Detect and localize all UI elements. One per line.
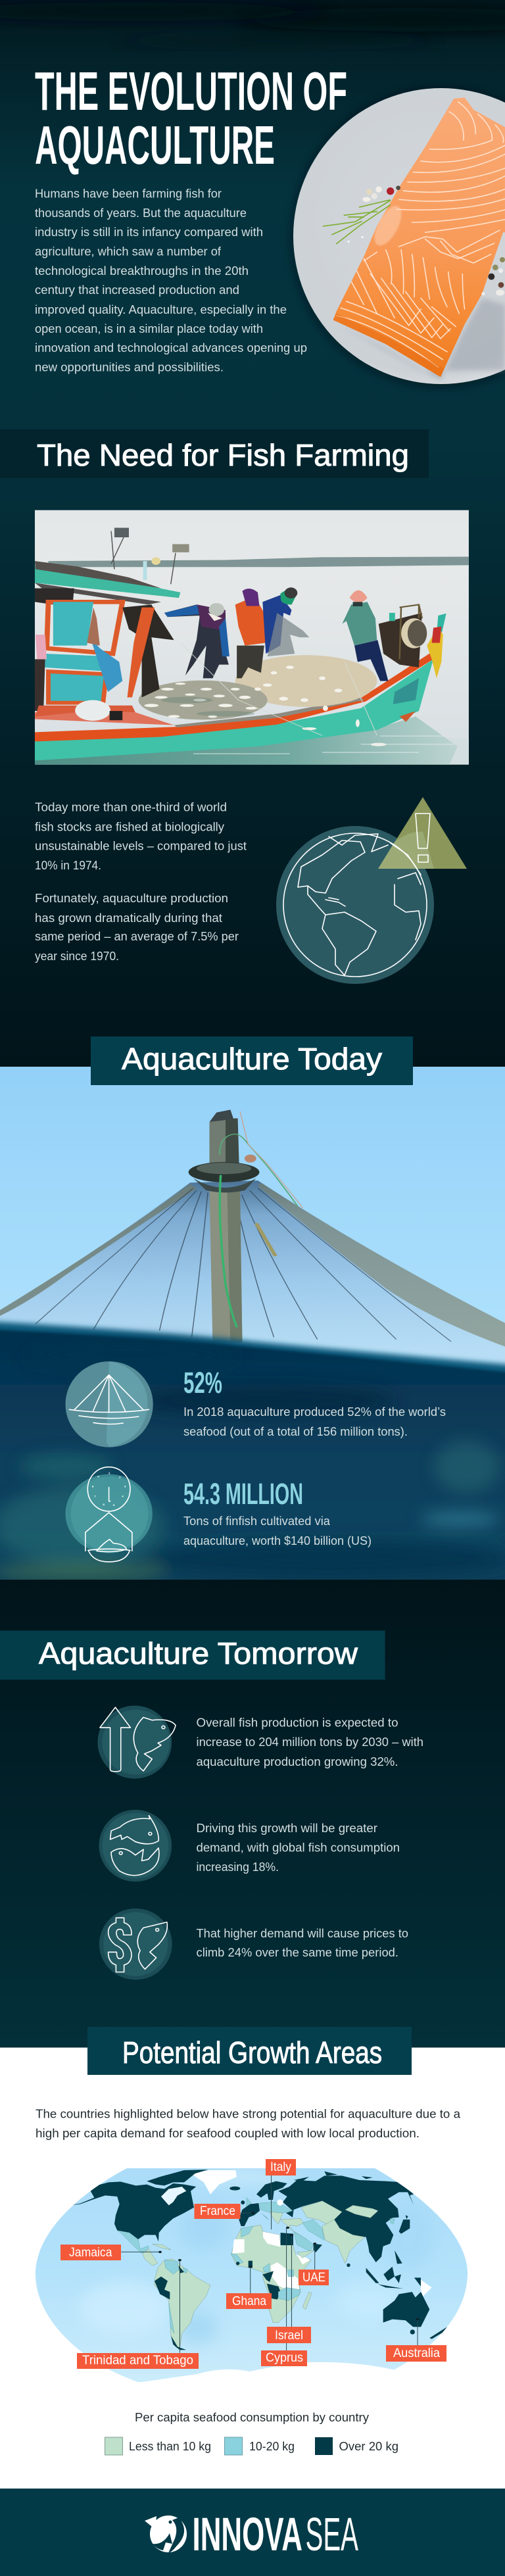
stat: 54.3 million with scale icon: Tons of finfish cultivated via [183, 1515, 331, 1528]
legend [105, 2411, 398, 2455]
middle east [280, 2218, 307, 2239]
text: overfishing facts: has grown dramatically during that [35, 911, 222, 925]
icon: scale with fish in bowl: 4 [122, 1495, 124, 1497]
southeast asia [366, 2268, 379, 2283]
map labels: Jamaica [69, 2246, 112, 2260]
intro paragraph: industry is still in its infancy compared with [35, 226, 263, 239]
background: dark ocean top section [0, 0, 505, 1067]
stat: 54.3 million with scale icon [65, 1467, 372, 1562]
icon: scale with fish in bowl: 7 [94, 1495, 97, 1497]
photo: fishermen hauling nets on a boat [35, 510, 469, 765]
map labels: Trinidad and Tobago [82, 2354, 193, 2368]
text: overfishing facts: 10% in 1974. [35, 859, 101, 872]
map labels: Israel [275, 2329, 303, 2343]
section heading: Aquaculture Tomorrow [0, 1631, 385, 1680]
map labels: Cyprus [266, 2351, 303, 2365]
item: fish production growth [97, 1706, 423, 1779]
south asia [322, 2220, 365, 2264]
photo background: aquaculture net pen in sky and water [0, 1067, 505, 1611]
world map of per capita seafood consumption [33, 2164, 473, 2384]
australia [383, 2292, 429, 2327]
item: higher prices: That higher demand will cause prices to [196, 1927, 408, 1940]
mexico [117, 2231, 149, 2254]
item: greater demand: demand, with global fish consumption [196, 1841, 400, 1855]
item: greater demand: Driving this growth will be greater [196, 1822, 377, 1835]
text: overfishing facts: unsustainable levels – compared to just [35, 839, 247, 852]
section heading: Aquaculture Today [91, 1036, 413, 1085]
map labels: Australia [393, 2346, 440, 2360]
icon: logo fish [145, 2515, 187, 2553]
legend: Over 20 kg [339, 2440, 398, 2453]
leader lines [121, 2175, 419, 2353]
icon: scale with fish in bowl: 2 [119, 1476, 121, 1478]
eurasia, africa and oceania [231, 2172, 450, 2339]
section heading: The Need for Fish Farming [0, 429, 429, 478]
icon: arrow and fish [97, 1706, 176, 1779]
icon: scale with fish in bowl: 9 [97, 1475, 100, 1478]
text: overfishing facts: year since 1970. [35, 950, 119, 963]
stat: 52 percent with net icon [65, 1361, 446, 1447]
item: fish production growth: aquaculture production growing 32%. [196, 1755, 398, 1768]
intro paragraph: agriculture, which saw a number of [35, 245, 222, 258]
main title: AQUACULTURE [35, 114, 275, 176]
legend: 10-20 kg [249, 2440, 295, 2453]
western europe isles [247, 2198, 253, 2206]
text: overfishing facts: same period – an average of 7.5% per [35, 930, 239, 943]
legend: Less than 10 kg [129, 2440, 211, 2453]
map labels: France [200, 2204, 235, 2218]
section heading: Potential Growth Areas: Potential Growth Areas [122, 2035, 382, 2070]
intro paragraph: Humans have been farming fish for [35, 187, 222, 200]
intro paragraph: open ocean, is in a similar place today with [35, 322, 263, 335]
icon: scale with fish in bowl [65, 1467, 153, 1562]
icon: scale with fish in bowl: 6 [103, 1503, 105, 1506]
map intro text [36, 2107, 461, 2140]
icon: dollar and fish [99, 1908, 172, 1980]
salmon plate image [291, 87, 505, 387]
background: dark band after today section through tomorrow section [0, 1580, 505, 2048]
section heading: The Need for Fish Farming: The Need for Fish Farming [37, 438, 409, 472]
icon: scale with fish in bowl: 3 [124, 1485, 126, 1488]
icon: scale with fish in bowl: 8 [92, 1485, 94, 1488]
greenland [191, 2170, 237, 2195]
mongolia [345, 2205, 378, 2218]
central asia [301, 2201, 342, 2224]
map intro text: The countries highlighted below have strong potential for aquaculture due to a [36, 2107, 461, 2120]
north america [69, 2181, 196, 2241]
intro paragraph: thousands of years. But the aquaculture [35, 207, 247, 220]
stat: 52 percent with net icon: 52% [183, 1366, 222, 1399]
text: overfishing facts: fish stocks are fished at biologically [35, 821, 224, 834]
item: greater demand: increasing 18%. [196, 1860, 279, 1874]
footer [0, 2489, 505, 2576]
intro paragraph: new opportunities and possibilities. [35, 360, 224, 374]
stat: 52 percent with net icon: In 2018 aquaculture produced 52% of the world’s [183, 1405, 446, 1419]
item: greater demand [99, 1810, 400, 1882]
map labels: Italy [270, 2160, 291, 2174]
section heading: Potential Growth Areas [87, 2027, 412, 2075]
americas and north atlantic [69, 2170, 253, 2350]
icon: scale with fish in bowl: 1 [108, 1471, 110, 1475]
stat: 54.3 million with scale icon: 54.3 MILLION [183, 1477, 303, 1511]
stat: 54.3 million with scale icon: aquaculture, worth $140 billion (US) [183, 1534, 372, 1547]
intro paragraph: improved quality. Aquaculture, especially in the [35, 303, 287, 316]
section heading: Aquaculture Today: Aquaculture Today [122, 1042, 382, 1076]
map labels: Ghana [232, 2295, 266, 2308]
europe and russia [278, 2175, 419, 2262]
intro paragraph: technological breakthroughs in the 20th [35, 264, 249, 278]
antarctica [141, 2362, 396, 2384]
east asia [390, 2218, 395, 2224]
icon: globe with warning triangle [276, 797, 467, 984]
icon: scale with fish in bowl: 5 [113, 1504, 115, 1507]
intro paragraph: century that increased production and [35, 283, 239, 297]
central europe [260, 2202, 293, 2213]
item: higher prices [99, 1908, 408, 1980]
text: overfishing facts: Today more than one-third of world [35, 801, 227, 814]
intro paragraph: innovation and technological advances opening up [35, 341, 307, 354]
central america and caribbean [143, 2249, 158, 2266]
map intro text: high per capita demand for seafood coupled with low local production. [36, 2127, 420, 2140]
item: fish production growth: Overall fish production is expected to [196, 1716, 398, 1730]
africa [231, 2225, 311, 2323]
south america [155, 2259, 210, 2349]
main title [35, 61, 347, 176]
section heading: Aquaculture Tomorrow: Aquaculture Tomorrow [39, 1636, 358, 1670]
item: higher prices: climb 24% over the same time period. [196, 1946, 398, 1959]
white panel: potential growth areas [0, 2048, 505, 2489]
icon: two fish [99, 1810, 172, 1882]
logo: Innovasea: SEA [305, 2509, 358, 2561]
text: overfishing facts: Fortunately, aquaculture production [35, 892, 228, 905]
intro paragraph [35, 187, 307, 374]
logo: Innovasea: INNOVA [192, 2509, 302, 2561]
map labels [60, 2159, 446, 2369]
text: overfishing facts [35, 801, 247, 963]
stat: 52 percent with net icon: seafood (out of a total of 156 million tons). [183, 1425, 408, 1438]
legend: Per capita seafood consumption by country [135, 2411, 369, 2424]
icon: net pen [65, 1361, 153, 1447]
item: fish production growth: increase to 204 million tons by 2030 – with [196, 1736, 423, 1749]
map labels: UAE [302, 2271, 325, 2285]
